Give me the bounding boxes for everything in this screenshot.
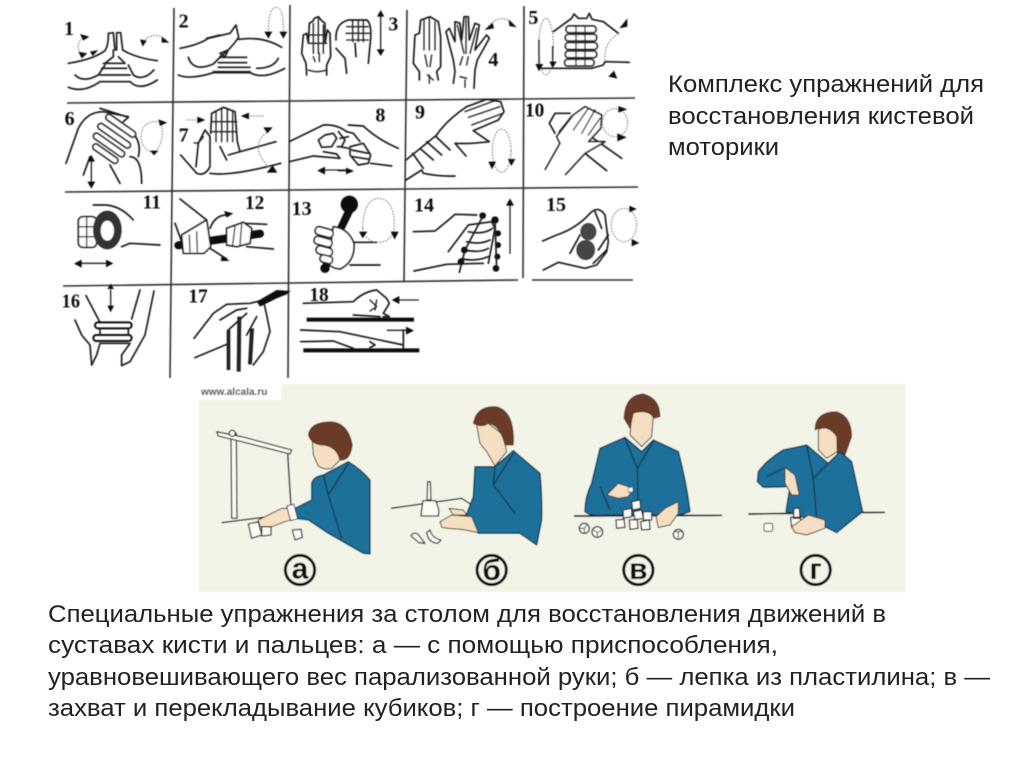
exercise 9: 9 — [415, 101, 425, 123]
label g — [801, 553, 830, 586]
exercise 6: 6 — [65, 108, 75, 130]
exercise 11: 11 — [143, 191, 161, 213]
exercise 4 — [413, 17, 517, 88]
row 1 exercises 1-2 — [64, 7, 287, 89]
exercise 5 — [528, 7, 629, 79]
exercise 16: 16 — [62, 291, 80, 313]
exercise 17: 17 — [188, 285, 208, 307]
chart grid lines — [63, 5, 638, 378]
exercise 6 — [65, 108, 167, 189]
exercise 11 — [74, 191, 161, 268]
exercise 8: 8 — [375, 105, 385, 127]
exercise 4: 4 — [488, 49, 498, 71]
figure g: building a pyramid — [748, 412, 885, 535]
exercise 14 — [413, 195, 514, 272]
exercise 9 — [406, 99, 515, 180]
row 2 exercises 8-10 — [337, 99, 628, 180]
figure v: stacking cubes — [574, 394, 722, 539]
label v: в — [629, 553, 648, 586]
watermark: www.alcala.ru — [200, 387, 267, 398]
exercise 3 — [302, 10, 398, 75]
exercise 1: 1 — [64, 18, 74, 40]
label g: г — [809, 553, 822, 586]
heading: complex of exercises — [668, 71, 984, 161]
exercise 5: 5 — [528, 7, 538, 29]
figure b: clay modelling — [391, 407, 542, 545]
exercise 2 — [178, 7, 287, 77]
heading: complex of exercises: восстановления кистевой — [668, 103, 974, 130]
exercise 8 — [337, 105, 398, 174]
heading: complex of exercises: моторики — [668, 134, 779, 161]
exercise 7 — [179, 107, 281, 174]
label b — [477, 554, 506, 587]
label v — [624, 553, 653, 586]
exercise 13: 13 — [292, 198, 312, 220]
exercise 10 — [525, 100, 628, 175]
exercise 18: 18 — [309, 284, 329, 306]
exercise 13 — [292, 196, 399, 273]
heading: complex of exercises: Комплекс упражнений для — [668, 71, 984, 98]
label b: б — [482, 554, 501, 587]
row 4 exercises 16-17 — [62, 284, 291, 372]
exercise 2: 2 — [179, 10, 189, 32]
exercise 12 — [175, 192, 273, 261]
exercise 16 — [62, 284, 154, 366]
exercise 18 — [301, 284, 419, 352]
panel: table exercises illustration — [199, 384, 906, 592]
caption text: Специальные упражнения за столом для восстановления движений в — [48, 601, 886, 628]
row 2 exercises 6-7 — [65, 107, 350, 189]
exercise 15: 15 — [546, 194, 566, 216]
caption text: суставах кисти и пальцев: а — с помощью приспособления, — [48, 632, 778, 659]
exercise 10: 10 — [525, 100, 544, 122]
row 1 exercises 3-5 — [302, 7, 629, 88]
row 3 exercises 11-12 — [74, 191, 273, 268]
exercise 8 hand — [289, 125, 350, 175]
exercise 12: 12 — [245, 192, 264, 214]
exercise 3: 3 — [388, 14, 398, 36]
exercise 7: 7 — [179, 125, 189, 147]
exercise 15 — [543, 194, 639, 270]
watermark — [199, 384, 281, 400]
figure a: balancing apparatus — [217, 422, 370, 554]
exercise 17 — [188, 285, 291, 372]
exercise 14: 14 — [414, 195, 434, 217]
caption text — [48, 601, 990, 722]
exercise 1 — [64, 18, 169, 89]
exercise chart: hand exercises 1-18 — [62, 5, 639, 378]
label a: а — [292, 552, 309, 585]
row 3 exercises 14-15 — [413, 194, 639, 272]
caption text: захват и перекладывание кубиков; г — построение пирамидки — [48, 695, 795, 722]
label a — [285, 552, 315, 585]
caption text: уравновешивающего вес парализованной руки; б — лепка из пластилина; в — — [48, 664, 990, 691]
